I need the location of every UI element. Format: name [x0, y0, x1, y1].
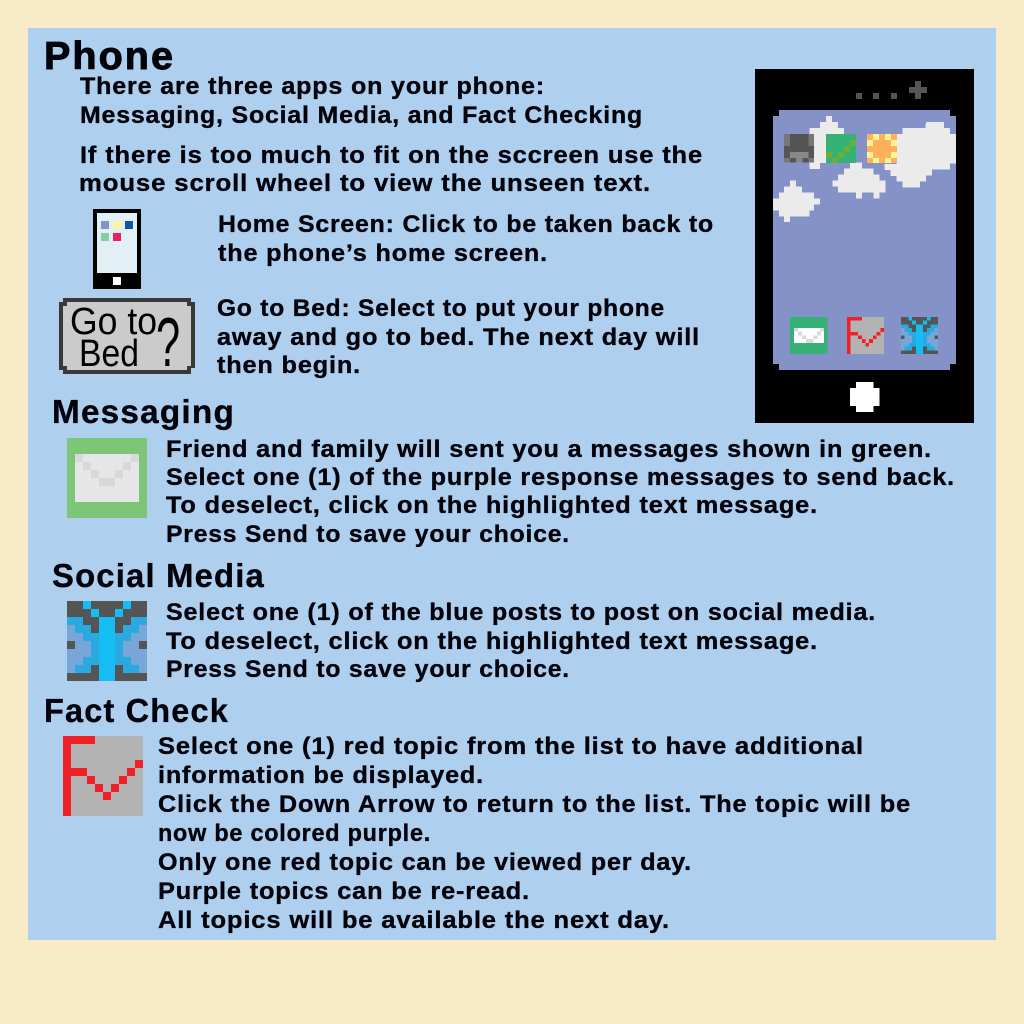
text block: go to bed: away and go to bed. The next day will — [217, 324, 700, 351]
app icon: sun — [867, 134, 897, 163]
text block: social media: To deselect, click on the highlighted text message. — [166, 628, 818, 655]
text block: fact check — [158, 733, 911, 934]
text block: home screen: the phone’s home screen. — [218, 240, 548, 267]
text block: fact check: Click the Down Arrow to return to the list. The topic will be — [158, 791, 911, 818]
text block: phone intro: There are three apps on your phone: — [80, 73, 545, 100]
plus sign and dots — [856, 81, 927, 99]
home button — [850, 382, 879, 412]
text block: scroll hint: mouse scroll wheel to view the unseen text. — [79, 170, 651, 197]
text block: fact check: now be colored purple. — [158, 820, 431, 847]
text block: fact check: All topics will be available the next day. — [158, 907, 670, 934]
icon: social media — [67, 601, 147, 681]
icon: messaging — [67, 438, 147, 518]
text block: fact check: Purple topics can be re-read. — [158, 878, 530, 905]
text block: fact check: Select one (1) red topic from the list to have additional — [158, 733, 864, 760]
wallpaper screen — [773, 110, 956, 370]
text block: scroll hint: If there is too much to fit on the sccreen use the — [80, 142, 703, 169]
heading: Social Media: Social Media — [52, 557, 265, 594]
text block: social media — [166, 599, 876, 683]
heading: Messaging: Messaging — [52, 393, 235, 430]
text block: messaging: To deselect, click on the highlighted text message. — [166, 492, 818, 519]
text block: fact check: Only one red topic can be viewed per day. — [158, 849, 692, 876]
heading: Phone: Phone — [44, 35, 175, 78]
app icon: fact check — [847, 317, 884, 354]
text block: home screen: Home Screen: Click to be taken back to — [218, 211, 714, 238]
text block: messaging: Friend and family will sent you a messages shown in green. — [166, 436, 932, 463]
text block: go to bed: Go to Bed: Select to put your phone — [217, 295, 665, 322]
app icon: social media — [901, 317, 938, 354]
app icon: green checks — [826, 134, 856, 163]
text block: social media: Press Send to save your choice. — [166, 656, 570, 683]
icon: go to bed button — [59, 298, 195, 382]
clouds — [773, 116, 956, 222]
icon: go to bed button: Go to — [70, 301, 157, 343]
text block: messaging: Select one (1) of the purple response messages to send back. — [166, 464, 955, 491]
text block: phone intro: Messaging, Social Media, and Fact Checking — [80, 102, 643, 129]
text block: scroll hint — [79, 142, 703, 197]
text block: fact check: information be displayed. — [158, 762, 484, 789]
text block: go to bed: then begin. — [217, 352, 361, 379]
text block: social media: Select one (1) of the blue posts to post on social media. — [166, 599, 876, 626]
icon: home screen phone — [93, 209, 141, 289]
illustration: phone home screen — [755, 69, 974, 423]
text block: phone intro — [80, 73, 643, 129]
icon: fact check — [63, 736, 143, 816]
text block: go to bed — [217, 295, 700, 379]
heading: Fact Check: Fact Check — [44, 692, 229, 729]
app icon: messaging — [790, 317, 828, 354]
icon: go to bed button: Bed — [79, 333, 139, 375]
app icon: save disk — [784, 134, 814, 163]
text block: messaging — [166, 436, 955, 548]
icon: go to bed button: ? — [156, 303, 180, 382]
text block: messaging: Press Send to save your choice. — [166, 521, 570, 548]
text block: home screen — [218, 211, 714, 267]
